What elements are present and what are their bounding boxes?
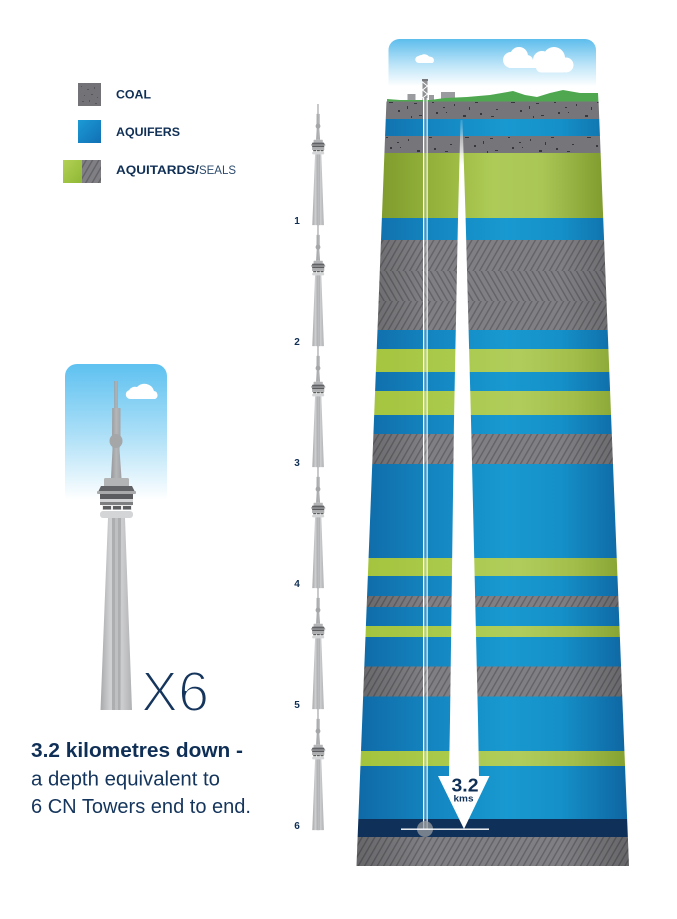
surface buildings xyxy=(408,92,455,101)
tower 3: 3 xyxy=(294,458,300,469)
panel: large CN Tower illustration xyxy=(65,364,167,710)
icon: small cloud xyxy=(415,54,434,63)
arrow: 3.2 kms depth: 3.2 xyxy=(452,776,478,796)
sky background xyxy=(65,364,167,500)
icon: CN Tower xyxy=(97,381,136,710)
legend: aquitards and seals: AQUITARDS/ xyxy=(116,163,200,177)
arrow: 3.2 kms depth xyxy=(438,120,490,829)
arrow: 3.2 kms depth: kms xyxy=(454,794,474,804)
tower 6: 6 xyxy=(294,821,300,832)
tower 5: 5 xyxy=(294,700,300,711)
text block: depth explanation xyxy=(31,740,251,818)
tower 6 xyxy=(294,709,325,832)
rock strata xyxy=(350,102,640,866)
tower 1 xyxy=(294,104,325,227)
icon: large cloud xyxy=(503,47,574,72)
tower 2: 2 xyxy=(294,337,300,348)
icon: drilling derrick xyxy=(422,79,428,100)
legend: aquifers xyxy=(78,120,180,143)
text block: depth explanation: a depth equivalent to xyxy=(31,768,220,790)
tower 2 xyxy=(294,225,325,348)
panel: geological cross-section xyxy=(350,39,640,866)
legend: aquitards and seals xyxy=(63,160,236,183)
stack of six CN Towers xyxy=(294,104,325,832)
tower 1: 1 xyxy=(294,216,300,227)
tower 4 xyxy=(294,467,325,590)
legend: aquifers: AQUIFERS xyxy=(116,125,180,139)
ground surface xyxy=(387,90,598,103)
well bore xyxy=(423,98,428,829)
text block: depth explanation: 6 CN Towers end to end. xyxy=(31,796,251,818)
tower 5 xyxy=(294,588,325,711)
legend: coal xyxy=(78,83,151,106)
icon: cloud xyxy=(126,384,158,399)
tower 3 xyxy=(294,346,325,469)
surface sky xyxy=(388,39,596,84)
tower 4: 4 xyxy=(294,579,300,590)
legend: coal: COAL xyxy=(116,88,151,102)
text block: depth explanation: 3.2 kilometres down - xyxy=(31,740,243,762)
multiplier X6: X6 xyxy=(141,660,209,724)
depth line xyxy=(401,828,489,830)
well base marker xyxy=(417,821,433,837)
legend: aquitards and seals: SEALS xyxy=(199,163,236,177)
legend xyxy=(63,83,236,183)
